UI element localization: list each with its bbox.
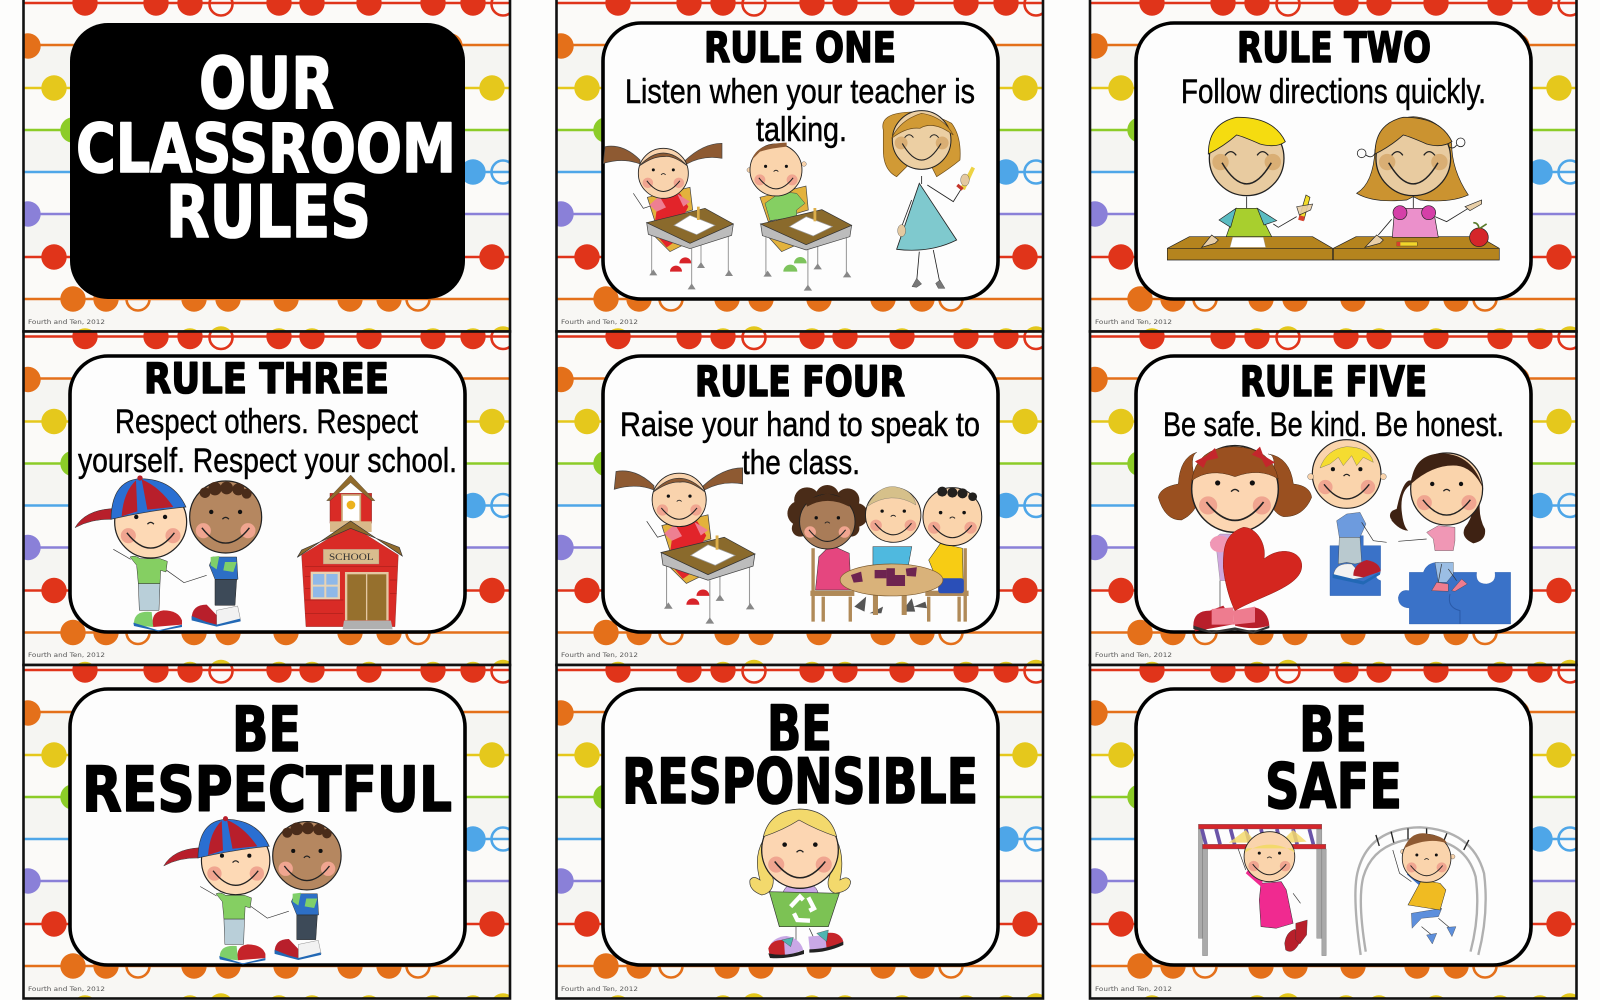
rule three text: yourself. Respect your school. [78, 442, 457, 480]
credit: Fourth and Ten, 2012 [561, 319, 638, 326]
rule three text [78, 403, 457, 480]
title: RULES [166, 170, 371, 254]
heading: be respectful: BE [232, 693, 301, 766]
card: Rule Two [1082, 0, 1583, 354]
illustration: three children with heart and puzzle [1158, 440, 1511, 633]
heading: be safe [1265, 693, 1402, 823]
heading: be safe: SAFE [1265, 750, 1402, 823]
title [76, 42, 456, 254]
card: Be Safe [1082, 657, 1583, 1000]
rule one text [625, 73, 975, 149]
heading: be respectful [82, 693, 452, 826]
panel: be responsible [603, 689, 998, 965]
title: CLASSROOM [76, 110, 456, 189]
panel: rule five [1136, 356, 1531, 632]
credit: Fourth and Ten, 2012 [1095, 986, 1172, 993]
card: Rule Five [1082, 324, 1583, 687]
illustration: children at desks and teacher [603, 111, 975, 291]
card: Rule One [548, 0, 1049, 354]
card: Rule Three [15, 324, 516, 687]
heading: be safe: BE [1299, 693, 1367, 766]
illustration: red schoolhouse: SCHOOL [329, 553, 374, 563]
panel: rule four [603, 356, 998, 632]
rule one text: Listen when your teacher is [625, 73, 975, 111]
heading: rule one: RULE ONE [704, 23, 896, 72]
panel: rule three [70, 356, 465, 632]
heading: rule two: RULE TWO [1237, 23, 1431, 72]
credit: Fourth and Ten, 2012 [28, 652, 105, 659]
credit: Fourth and Ten, 2012 [28, 319, 105, 326]
illustration: red schoolhouse [297, 475, 402, 629]
illustration: girl with recycling sign [750, 809, 851, 958]
illustration: two boys [75, 475, 262, 631]
rule two text: Follow directions quickly. [1181, 73, 1486, 111]
rule four text: the class. [742, 444, 860, 482]
heading: be respectful: RESPECTFUL [82, 753, 452, 826]
panel: black title plate [70, 23, 465, 299]
card: Be Responsible [548, 657, 1049, 1000]
panel: rule two [1136, 23, 1531, 299]
credit: Fourth and Ten, 2012 [561, 652, 638, 659]
heading: rule three: RULE THREE [144, 354, 389, 403]
card: Rule Four [548, 324, 1049, 687]
illustration: girl at desk and group at table [614, 468, 982, 624]
heading: rule five: RULE FIVE [1240, 357, 1427, 406]
title: OUR [199, 42, 334, 125]
heading: be responsible [622, 692, 978, 818]
rule five text: Be safe. Be kind. Be honest. [1163, 406, 1504, 444]
illustration: children at a long desk [1167, 117, 1499, 260]
card: Our Classroom Rules [15, 0, 516, 354]
heading: be responsible: RESPONSIBLE [622, 745, 978, 818]
panel: be safe [1136, 689, 1531, 965]
illustration: two boys [164, 816, 341, 964]
credit: Fourth and Ten, 2012 [1095, 319, 1172, 326]
rule four text [620, 406, 980, 482]
credit: Fourth and Ten, 2012 [561, 986, 638, 993]
illustration: children on monkey bars [1198, 824, 1486, 956]
rule four text: Raise your hand to speak to [620, 406, 980, 444]
credit: Fourth and Ten, 2012 [1095, 652, 1172, 659]
rule three text: Respect others. Respect [115, 403, 418, 441]
heading: be responsible: BE [767, 692, 832, 765]
rule one text: talking. [756, 111, 847, 149]
card: Be Respectful [15, 657, 516, 1000]
credit: Fourth and Ten, 2012 [28, 986, 105, 993]
heading: rule four: RULE FOUR [695, 357, 905, 406]
panel: rule one [603, 23, 998, 299]
panel: be respectful [70, 689, 465, 965]
